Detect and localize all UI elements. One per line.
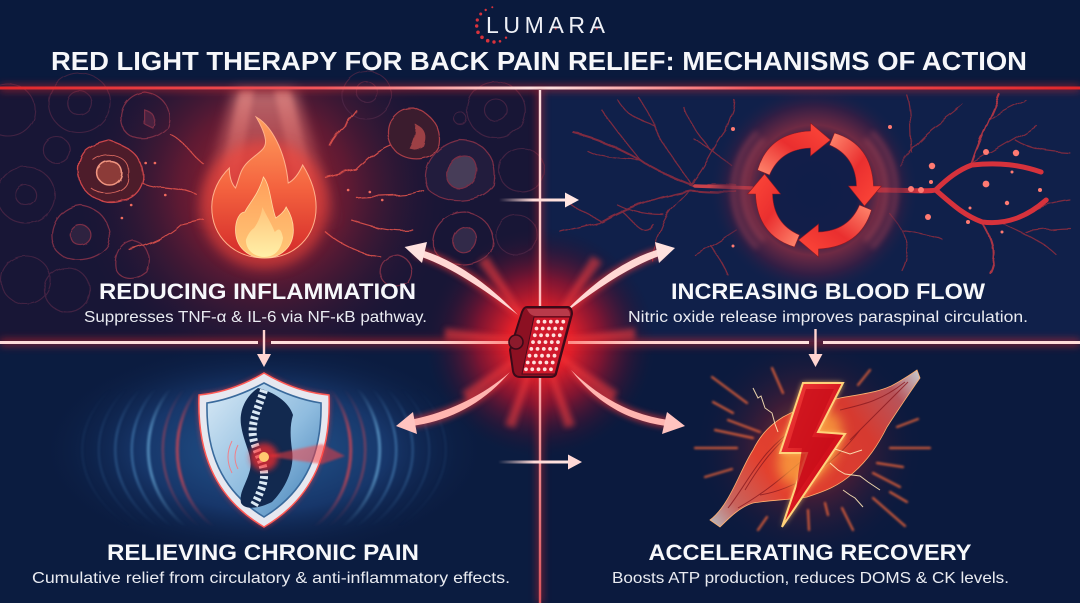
spine vertebrae bbox=[253, 390, 264, 505]
device front face bbox=[522, 317, 570, 374]
header rule bbox=[0, 85, 1080, 91]
title: RED LIGHT THERAPY FOR BACK PAIN RELIEF: MECHANISMS OF ACTION bbox=[51, 46, 1027, 76]
icon: circular arrows bbox=[748, 123, 882, 257]
inflamed cells and signal lines bbox=[0, 71, 544, 312]
arrow: device to blood flow bbox=[562, 242, 675, 315]
led dots bbox=[526, 322, 564, 369]
logo dots bbox=[475, 6, 598, 44]
logo wordmark: LUMARA bbox=[486, 12, 606, 38]
heading: increasing blood flow: INCREASING BLOOD FLOW bbox=[671, 279, 986, 304]
panel: increasing blood flow bbox=[561, 85, 1070, 326]
heading: accelerating recovery: ACCELERATING RECOVERY bbox=[648, 540, 972, 565]
arrow: device to inflammation bbox=[405, 242, 518, 315]
icon: muscle bbox=[710, 370, 920, 527]
back silhouette bbox=[241, 388, 293, 508]
arrow: inflammation to chronic pain bbox=[257, 330, 271, 367]
heading: relieving chronic pain: RELIEVING CHRONIC PAIN bbox=[107, 540, 419, 565]
heading: reducing inflammation: REDUCING INFLAMMATION bbox=[99, 279, 416, 304]
glow behind lightning bbox=[765, 399, 855, 497]
bright artery on right bbox=[695, 164, 1046, 223]
arrow: blood flow to recovery bbox=[808, 329, 822, 367]
text: inflammation description: Suppresses TNF-α & IL-6 via NF-κB pathway. bbox=[84, 309, 427, 326]
concentric wave rings bbox=[82, 392, 446, 524]
panel: reducing inflammation bbox=[0, 71, 544, 326]
vessel network bbox=[561, 95, 1070, 275]
logo: lumara bbox=[475, 6, 606, 44]
central burst glow bbox=[425, 227, 655, 457]
icon: lightning bolt bbox=[780, 383, 845, 527]
text: recovery description: Boosts ATP production, reduces DOMS & CK levels. bbox=[612, 570, 1009, 587]
arrow: chronic pain to recovery bbox=[498, 454, 582, 470]
energy rays bbox=[695, 368, 930, 530]
vertical divider bbox=[537, 90, 543, 603]
text: blood flow description: Nitric oxide release improves paraspinal circulation. bbox=[628, 309, 1028, 326]
arrow: device to chronic pain bbox=[396, 372, 510, 434]
light rays from device bbox=[445, 256, 635, 428]
bright cell right bbox=[388, 108, 439, 159]
device knob bbox=[509, 335, 523, 349]
icon: red light therapy device bbox=[509, 307, 572, 377]
red blood cell dots bbox=[731, 125, 1042, 248]
arrow: inflammation to blood flow bbox=[499, 192, 579, 208]
icon: flame bbox=[200, 117, 328, 269]
arrow: device to recovery bbox=[571, 370, 685, 434]
electric sparks bbox=[753, 388, 880, 507]
ripple arcs bbox=[733, 132, 896, 248]
icon: shield with spine bbox=[199, 373, 345, 527]
pulsing glow around cycle bbox=[710, 85, 920, 295]
text: chronic pain description: Cumulative relief from circulatory & anti-inflammatory effects. bbox=[32, 570, 510, 587]
light beams above flame bbox=[190, 90, 345, 240]
panel: accelerating recovery bbox=[612, 333, 1009, 587]
bright cell left bbox=[78, 140, 143, 202]
horizontal divider bbox=[0, 339, 1080, 346]
pain point glow bbox=[228, 441, 345, 473]
panel: relieving chronic pain bbox=[32, 362, 508, 586]
